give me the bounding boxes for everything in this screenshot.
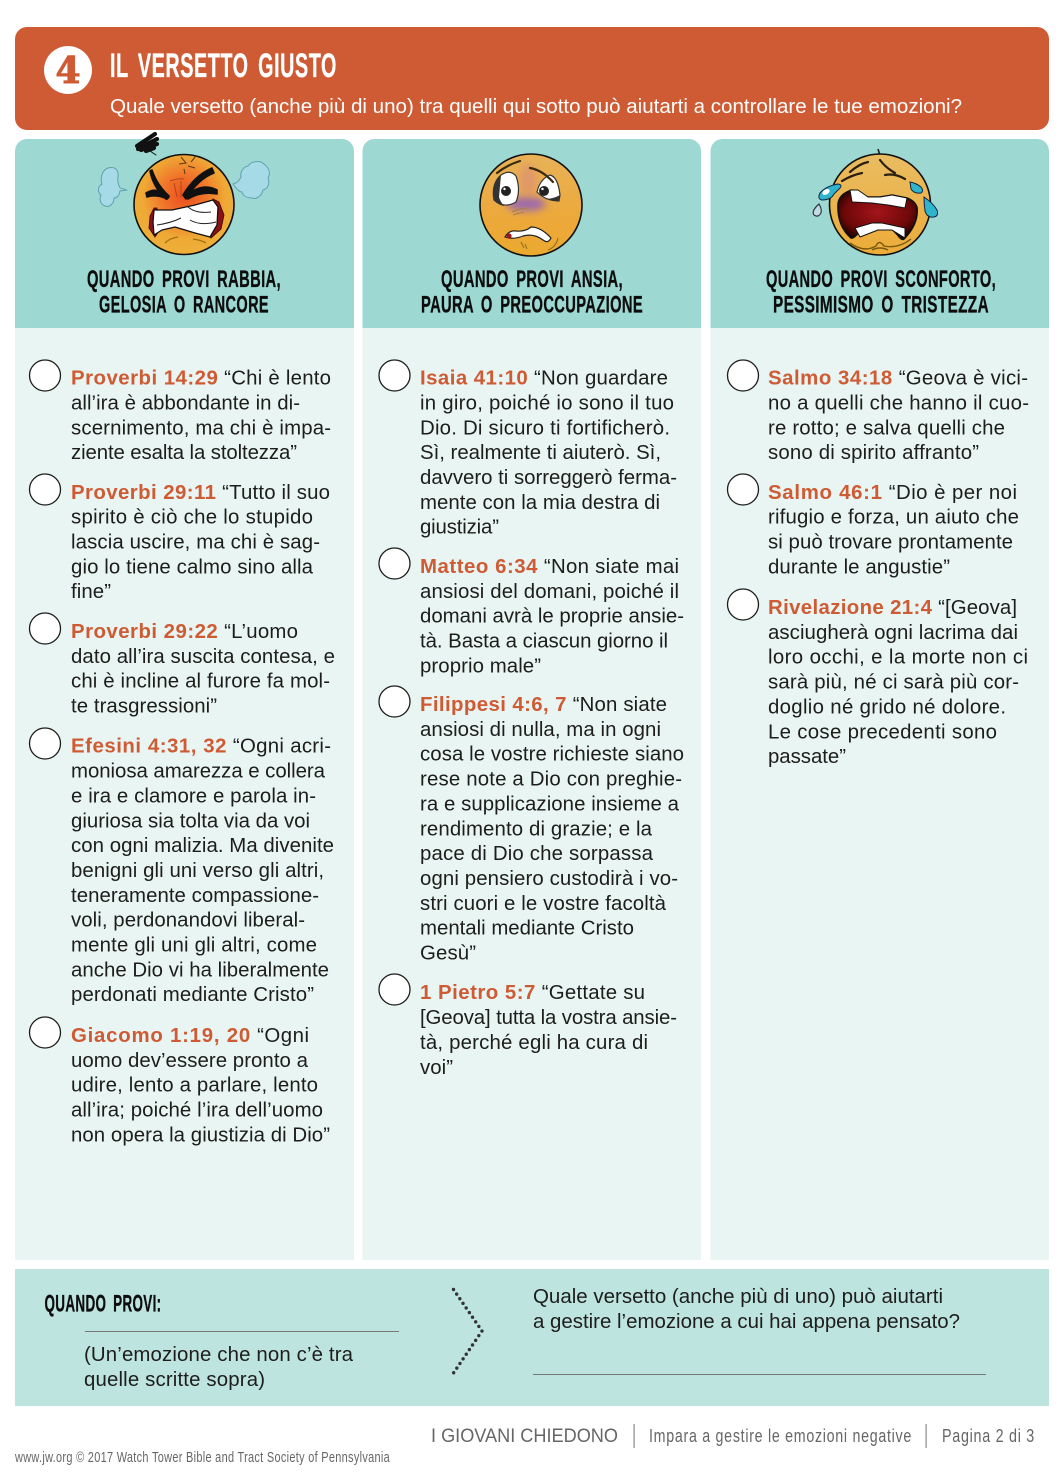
verse: 1 Pietro 5:7: 1 Pietro 5:7 “Gettate su	[420, 982, 645, 1004]
panel: anxiety column	[362, 139, 701, 1260]
verse: Efesini 4:31, 32: moniosa amarezza e collera	[71, 761, 326, 783]
verse: Filippesi 4:6, 7: ogni pensiero custodirà i vo-	[420, 868, 678, 890]
verse: Rivelazione 21:4: asciugherà ogni lacrima dai	[768, 622, 1018, 644]
verse: Salmo 46:1: rifugio e forza, un aiuto che	[768, 507, 1019, 529]
verse: Salmo 34:18: Salmo 34:18 “Geova è vici-	[768, 368, 1028, 390]
verse: Efesini 4:31, 32: giuriosa sia tolta via da voi	[71, 810, 310, 832]
verse: Giacomo 1:19, 20: udire, lento a parlare, lento	[71, 1075, 318, 1097]
verse: Salmo 46:1: durante le angustie”	[768, 556, 950, 578]
verse: Isaia 41:10: Sì, realmente ti aiuterò. Sì,	[420, 442, 661, 464]
verse: Filippesi 4:6, 7: stri cuori e le vostre facoltà	[420, 893, 667, 915]
verse: Giacomo 1:19, 20: non opera la giustizia di Dio”	[71, 1124, 330, 1146]
verse: Isaia 41:10: mente con la mia destra di	[420, 492, 660, 514]
verse: Matteo 6:34: tà. Basta a ciascun giorno il	[420, 631, 668, 653]
verse: Efesini 4:31, 32: mente gli uni gli altri, come	[71, 934, 317, 956]
verse: Filippesi 4:6, 7: rendimento di grazie; e la	[420, 818, 653, 840]
verse: Salmo 34:18: no a quelli che hanno il cuo-	[768, 392, 1029, 414]
verse: Efesini 4:31, 32	[30, 728, 334, 1006]
verse: Matteo 6:34: ansiosi del domani, poiché il	[420, 581, 679, 603]
verse: Filippesi 4:6, 7: cosa le vostre richieste siano	[420, 744, 684, 766]
verse: Filippesi 4:6, 7: ra e supplicazione insieme a	[420, 793, 680, 815]
verse: Salmo 46:1	[728, 474, 1019, 578]
verse: Proverbi 29:11: Proverbi 29:11 “Tutto il suo	[71, 482, 330, 504]
verse: Proverbi 29:11: lascia uscire, ma chi è sag-	[71, 532, 320, 554]
column heading	[421, 266, 643, 318]
icon: angry face	[98, 134, 269, 254]
verse: Filippesi 4:6, 7	[379, 686, 684, 964]
series name: I GIOVANI CHIEDONO	[431, 1426, 618, 1447]
verse: Efesini 4:31, 32: anche Dio vi ha liberalmente	[71, 959, 329, 981]
note text: quelle scritte sopra)	[84, 1369, 265, 1391]
verse: Salmo 34:18	[728, 360, 1029, 464]
note text: (Un’emozione che non c’è tra	[84, 1344, 354, 1366]
verse: Salmo 46:1: Salmo 46:1 “Dio è per noi	[768, 482, 1017, 504]
verse: 1 Pietro 5:7	[379, 974, 677, 1079]
column heading	[766, 266, 996, 318]
verse: Proverbi 14:29: Proverbi 14:29 “Chi è lento	[71, 368, 331, 390]
verse: Matteo 6:34: domani avrà le proprie ansie-	[420, 606, 684, 628]
verse: Rivelazione 21:4: sarà più, né ci sarà più cor-	[768, 672, 1019, 694]
verse: Proverbi 29:22: te trasgressioni”	[71, 696, 217, 718]
column heading: QUANDO PROVI ANSIA,	[441, 266, 623, 293]
article title: Impara a gestire le emozioni negative	[649, 1426, 912, 1446]
icon: anxious face	[480, 154, 582, 256]
panel: sadness column	[710, 139, 1049, 1260]
verse: Efesini 4:31, 32: perdonati mediante Cristo”	[71, 984, 314, 1006]
verse: Efesini 4:31, 32: teneramente compassione-	[71, 885, 319, 907]
verse: Matteo 6:34: proprio male”	[420, 655, 541, 677]
page number: Pagina 2 di 3	[942, 1426, 1035, 1446]
verse: Salmo 34:18: re rotto; e salva quelli che	[768, 417, 1005, 439]
verse: 1 Pietro 5:7: [Geova] tutta la vostra ansie-	[420, 1007, 677, 1029]
verse: Proverbi 14:29	[30, 360, 331, 464]
verse: 1 Pietro 5:7: voi”	[420, 1057, 453, 1079]
panel: other emotion	[15, 1269, 1049, 1406]
verse: Proverbi 29:22: Proverbi 29:22 “L’uomo	[71, 621, 298, 643]
column heading	[87, 266, 281, 318]
verse: Filippesi 4:6, 7: pace di Dio che sorpassa	[420, 843, 654, 865]
verse: Proverbi 14:29: ziente esalta la stoltezza”	[71, 442, 297, 464]
verse: Filippesi 4:6, 7: Filippesi 4:6, 7 “Non siate	[420, 694, 667, 716]
note text	[84, 1344, 354, 1391]
verse: Giacomo 1:19, 20	[30, 1017, 330, 1146]
header banner	[15, 27, 1049, 130]
verse: Isaia 41:10: in giro, poiché io sono il tuo	[420, 392, 674, 414]
verse: Rivelazione 21:4: Rivelazione 21:4 “[Geova]	[768, 597, 1017, 619]
verse: Filippesi 4:6, 7: ansiosi di nulla, ma in ogni	[420, 719, 661, 741]
verse: Isaia 41:10: davvero ti sorreggerò ferma-	[420, 467, 677, 489]
question text	[533, 1286, 960, 1333]
verse: 1 Pietro 5:7: tà, perché egli ha cura di	[420, 1032, 648, 1054]
verse: Proverbi 29:11	[30, 474, 330, 603]
verse: Proverbi 14:29: all’ira è abbondante in di-	[71, 392, 300, 414]
verse: Rivelazione 21:4: doglio né grido né dolore.	[768, 696, 1006, 718]
subtitle: Quale versetto (anche più di uno) tra quelli qui sotto può aiutarti a controllare le tue emozioni?	[110, 96, 962, 118]
verse: Proverbi 29:11: spirito è ciò che lo stupido	[71, 507, 313, 529]
step number badge: 4	[55, 50, 81, 92]
answer line	[533, 1374, 986, 1376]
title: IL VERSETTO GIUSTO	[110, 47, 337, 85]
column heading: PAURA O PREOCCUPAZIONE	[421, 292, 643, 318]
verse: Isaia 41:10	[379, 360, 677, 539]
answer line	[85, 1330, 399, 1332]
verse: Efesini 4:31, 32: Efesini 4:31, 32 “Ogni acri-	[71, 736, 331, 758]
prompt heading: QUANDO PROVI:	[44, 1290, 162, 1318]
verse: Isaia 41:10: Dio. Di sicuro ti fortificherò.	[420, 417, 670, 439]
verse: Salmo 46:1: si può trovare prontamente	[768, 532, 1013, 554]
column heading: QUANDO PROVI RABBIA,	[87, 266, 281, 293]
verse: Proverbi 29:11: gio lo tiene calmo sino alla	[71, 556, 314, 578]
verse: Rivelazione 21:4	[728, 589, 1028, 768]
verse: Isaia 41:10: giustizia”	[420, 517, 499, 539]
verse: Proverbi 29:11: fine”	[71, 581, 111, 603]
verse: Matteo 6:34: Matteo 6:34 “Non siate mai	[420, 556, 679, 578]
verse: Proverbi 29:22: chi è incline al furore fa mol-	[71, 671, 330, 693]
verse: Efesini 4:31, 32: e ira e clamore e parola in-	[71, 785, 316, 807]
verse: Matteo 6:34	[379, 548, 684, 677]
verse: Giacomo 1:19, 20: Giacomo 1:19, 20 “Ogni	[71, 1025, 309, 1047]
panel: anger column	[15, 134, 354, 1260]
verse: Isaia 41:10: Isaia 41:10 “Non guardare	[420, 368, 668, 390]
verse: Proverbi 14:29: scernimento, ma chi è impa-	[71, 417, 331, 439]
verse: Filippesi 4:6, 7: mentali mediante Cristo	[420, 918, 634, 940]
verse: Proverbi 29:22	[30, 613, 335, 718]
verse: Efesini 4:31, 32: con ogni malizia. Ma divenite	[71, 835, 334, 857]
question text: a gestire l’emozione a cui hai appena pensato?	[533, 1311, 960, 1333]
footer	[14, 1424, 1035, 1466]
verse: Giacomo 1:19, 20: uomo dev’essere pronto a	[71, 1050, 309, 1072]
verse: Salmo 34:18: sono di spirito affranto”	[768, 442, 979, 464]
arrow: dotted chevron	[454, 1290, 482, 1373]
copyright: www.jw.org © 2017 Watch Tower Bible and Tract Society of Pennsylvania	[14, 1450, 390, 1466]
verse: Proverbi 29:22: dato all’ira suscita contesa, e	[71, 646, 335, 668]
verse: Giacomo 1:19, 20: all’ira; poiché l’ira dell’uomo	[71, 1100, 323, 1122]
icon: crying face	[813, 149, 938, 255]
verse: Efesini 4:31, 32: voli, perdonandovi liberal-	[71, 910, 305, 932]
verse: Efesini 4:31, 32: benigni gli uni verso gli altri,	[71, 860, 324, 882]
question text: Quale versetto (anche più di uno) può aiutarti	[533, 1286, 943, 1308]
verse: Filippesi 4:6, 7: rese note a Dio con preghie-	[420, 769, 682, 791]
verse: Rivelazione 21:4: passate”	[768, 746, 846, 768]
verse: Rivelazione 21:4: loro occhi, e la morte non ci	[768, 647, 1028, 669]
step number badge	[44, 46, 92, 94]
verse: Rivelazione 21:4: Le cose precedenti sono	[768, 721, 997, 743]
verse: Filippesi 4:6, 7: Gesù”	[420, 942, 476, 964]
column heading: GELOSIA O RANCORE	[99, 292, 269, 318]
